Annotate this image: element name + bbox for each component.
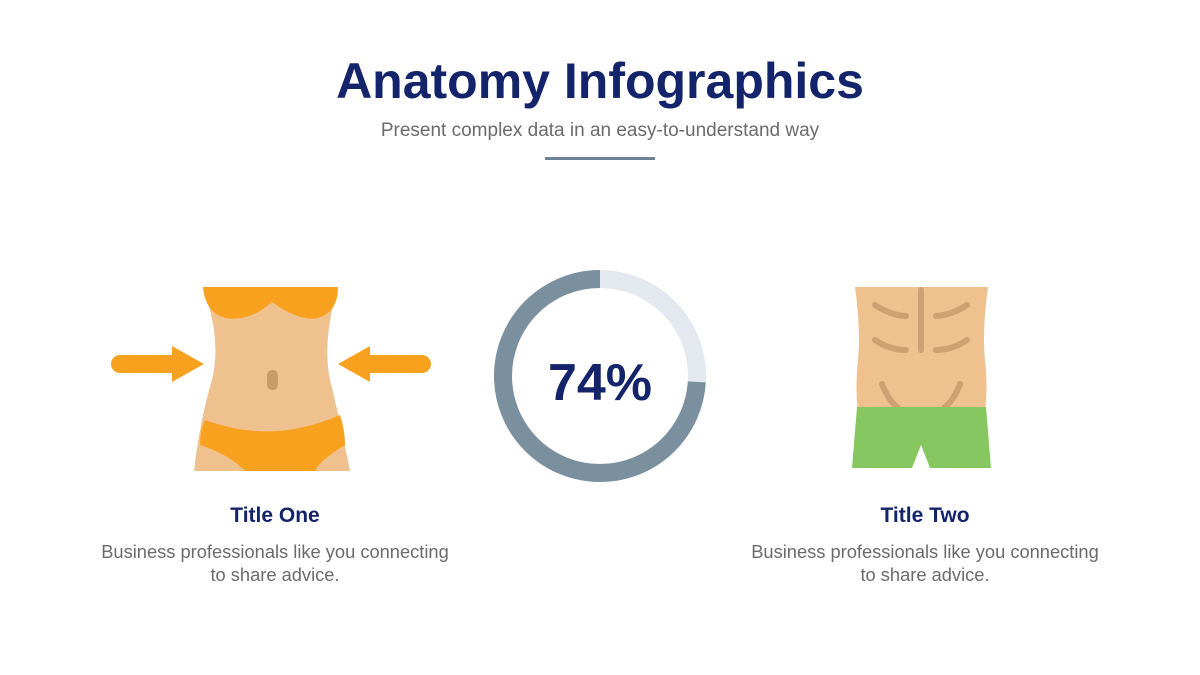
icon: male abs — [852, 287, 991, 468]
text block: Title Two: Title Two — [880, 504, 970, 527]
subtitle: Present complex data in an easy-to-understand way — [381, 120, 819, 141]
text block: Title Two: Business professionals like you connecting — [751, 541, 1099, 562]
text block: Title One: Business professionals like you connecting — [101, 541, 449, 562]
arrow left — [111, 346, 204, 382]
text block: Title One: Title One — [230, 504, 320, 527]
arrow right — [338, 346, 431, 382]
donut chart 74%: 74% — [548, 354, 652, 412]
donut chart 74% — [494, 270, 706, 482]
text block: Title Two — [751, 504, 1099, 585]
text block: Title Two: to share advice. — [860, 564, 990, 585]
text block: Title One: to share advice. — [210, 564, 340, 585]
text block: Title One — [101, 504, 449, 585]
title: Anatomy Infographics — [336, 53, 864, 109]
icon: female waist with arrows — [111, 287, 431, 471]
